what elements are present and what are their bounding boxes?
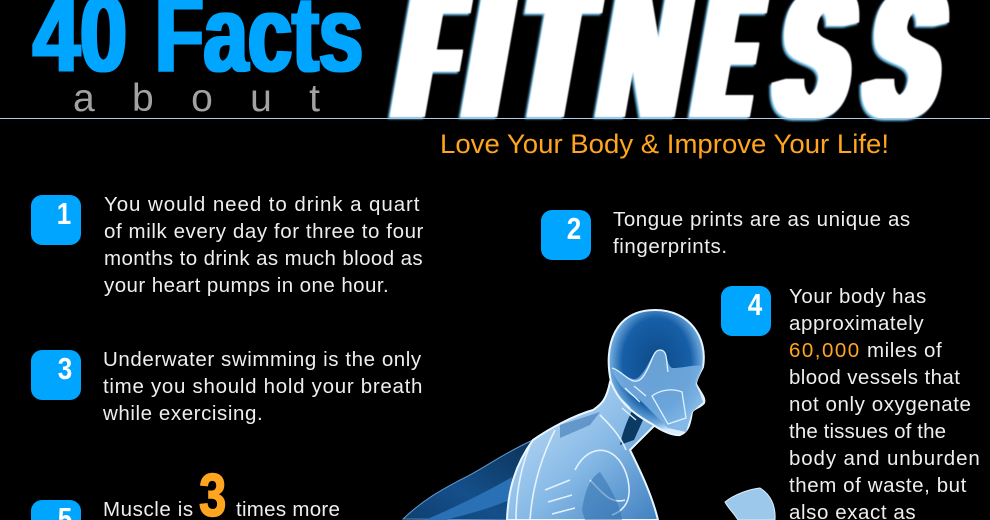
badge 5 — [31, 500, 81, 520]
badge 2: 2 — [567, 211, 581, 246]
fact 4 text — [789, 285, 981, 520]
back arm — [403, 440, 533, 520]
fist — [725, 488, 775, 520]
fact 4 text: approximately — [789, 312, 924, 335]
badge 2 — [541, 210, 591, 260]
title: FITNESS — [390, 0, 958, 155]
badge 4 — [721, 286, 771, 336]
fact 2 text — [613, 208, 911, 258]
badge 1 — [31, 195, 81, 245]
fact 4 text: the tissues of the — [789, 420, 946, 443]
fact 1 text: of milk every day for three to four — [104, 220, 424, 243]
fact 4 text: blood vessels that — [789, 366, 960, 389]
figure: x-ray runner — [403, 310, 775, 520]
tagline: Love Your Body & Improve Your Life! — [440, 129, 889, 159]
subtitle: about: about — [73, 77, 320, 120]
badge 3 — [31, 350, 81, 400]
fact 3 text: Underwater swimming is the only — [103, 348, 422, 371]
badge 3: 3 — [58, 351, 72, 386]
title: 40 Facts — [33, 0, 363, 94]
neck shadow — [620, 392, 652, 445]
fact 3 text: time you should hold your breath — [103, 375, 423, 398]
fact 1 text: You would need to drink a quart — [104, 193, 420, 216]
fact 2 text: fingerprints. — [613, 235, 728, 258]
head — [609, 310, 704, 435]
skull base and jaw — [612, 350, 703, 432]
fact 1 text: your heart pumps in one hour. — [104, 274, 389, 297]
fact 1 text — [104, 193, 424, 297]
fact 1 text: months to drink as much blood as — [104, 247, 423, 270]
header divider line — [0, 118, 990, 119]
fact 4 text: them of waste, but — [789, 474, 967, 497]
fact 3 text — [103, 348, 423, 425]
fact 3 text: while exercising. — [103, 402, 263, 425]
fact 4 text: not only oxygenate — [789, 393, 972, 416]
fact 4 text: 60,000 miles of — [789, 339, 942, 362]
torso muscle detail — [516, 415, 629, 520]
fact 2 text: Tongue prints are as unique as — [613, 208, 911, 231]
torso — [507, 382, 660, 520]
badge 4: 4 — [748, 287, 762, 322]
fact 4 text: Your body has — [789, 285, 927, 308]
fact 4 text: body and unburden — [789, 447, 981, 470]
badge 1: 1 — [57, 196, 71, 231]
